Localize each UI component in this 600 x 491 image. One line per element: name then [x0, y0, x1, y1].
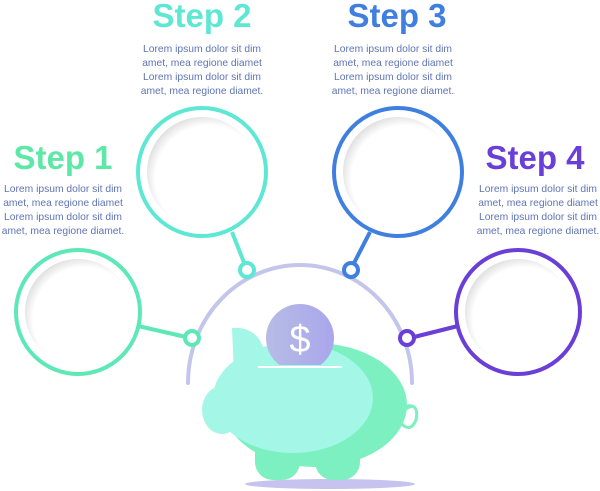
step 3 text: amet, mea regione diamet.: [332, 86, 454, 97]
step 4 text: Lorem ipsum dolor sit dim: [479, 212, 597, 223]
piggy bank: [202, 304, 417, 489]
step 1 title: Step 1: [13, 139, 113, 176]
step 1 text: Lorem ipsum dolor sit dim: [4, 184, 122, 195]
step 1 text: [2, 184, 124, 237]
step 3 text: Lorem ipsum dolor sit dim: [334, 44, 452, 55]
piggy bank: $: [289, 319, 311, 361]
step 1 text: amet, mea regione diamet.: [2, 226, 124, 237]
step 2 text: Lorem ipsum dolor sit dim: [143, 44, 261, 55]
step 2 text: Lorem ipsum dolor sit dim: [143, 72, 261, 83]
step 4 text: amet, mea regione diamet.: [477, 226, 599, 237]
step 3 text: [332, 44, 454, 97]
step 2 text: amet, mea regione diamet: [142, 58, 262, 69]
step 4 text: Lorem ipsum dolor sit dim: [479, 184, 597, 195]
step circles: [16, 108, 580, 374]
step 1 text: amet, mea regione diamet: [3, 198, 123, 209]
step 2 text: [141, 44, 263, 97]
step 4 text: amet, mea regione diamet: [478, 198, 598, 209]
step 4 text: [477, 184, 599, 237]
step 3 text: Lorem ipsum dolor sit dim: [334, 72, 452, 83]
connectors: [138, 232, 458, 345]
step 2 text: amet, mea regione diamet.: [141, 86, 263, 97]
step 4 title: Step 4: [485, 139, 585, 176]
arc: [188, 265, 412, 383]
step 1 text: Lorem ipsum dolor sit dim: [4, 212, 122, 223]
step 3 text: amet, mea regione diamet: [333, 58, 453, 69]
